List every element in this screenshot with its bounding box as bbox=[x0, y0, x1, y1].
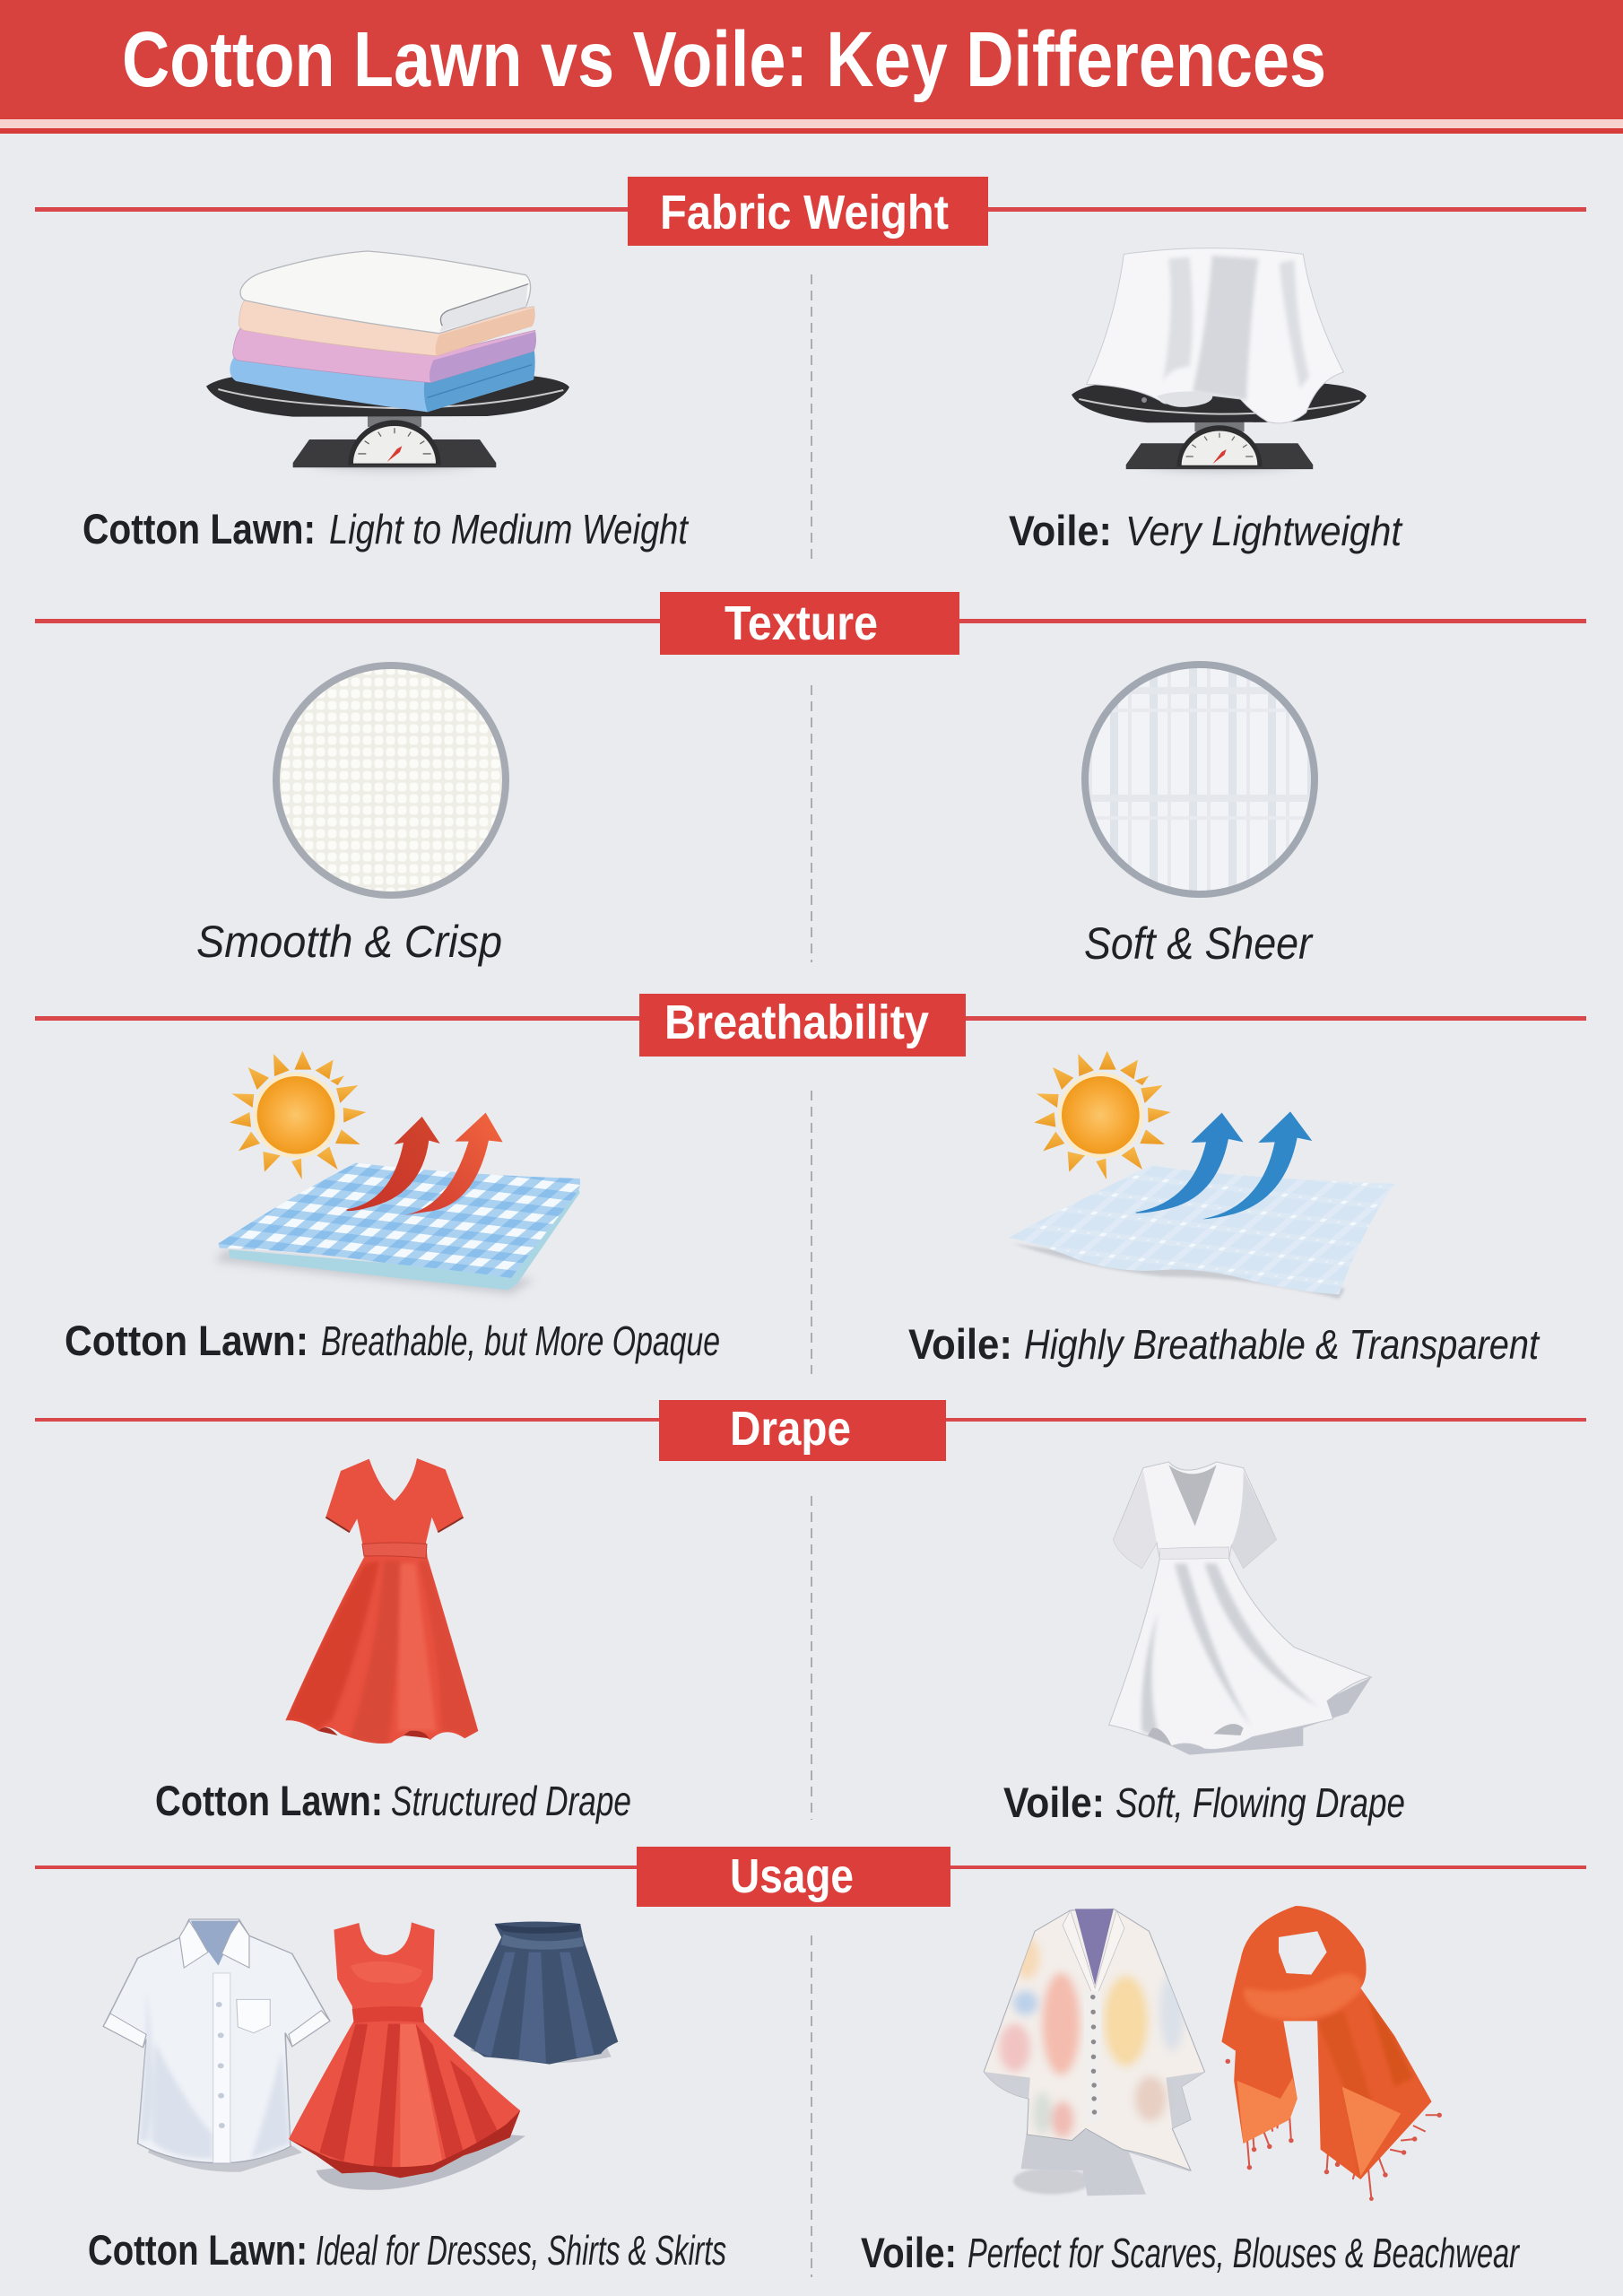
caption: voile breathability: Voile: bbox=[908, 1320, 1012, 1368]
gingham cloth bbox=[218, 1163, 580, 1278]
sheer cloth bbox=[1009, 1165, 1394, 1294]
icons: shirt, red dress and skirt bbox=[103, 1919, 618, 2190]
caption: voile usage: Voile: bbox=[861, 2229, 957, 2276]
scale plate bbox=[1072, 382, 1367, 422]
caption: voile texture: Soft & Sheer bbox=[1084, 918, 1314, 969]
caption: cotton lawn drape: Structured Drape bbox=[391, 1778, 631, 1824]
title banner bbox=[0, 0, 1623, 134]
caption: voile breathability: Highly Breathable & Transparent bbox=[1024, 1321, 1541, 1368]
caption: voile fabric weight: Voile: bbox=[1009, 507, 1112, 554]
caption: voile drape: Soft, Flowing Drape bbox=[1115, 1779, 1405, 1826]
icon: structured red dress bbox=[285, 1458, 478, 1744]
red dress bbox=[289, 1922, 525, 2190]
caption: voile fabric weight bbox=[1009, 507, 1403, 554]
blue folded fabric bbox=[230, 345, 535, 412]
blue arrow one bbox=[1136, 1113, 1244, 1213]
caption: cotton lawn breathability bbox=[65, 1317, 720, 1364]
divider: usage bbox=[811, 1935, 812, 2277]
sun bbox=[1034, 1051, 1171, 1179]
section header: Drape bbox=[35, 1400, 1586, 1461]
caption: cotton lawn fabric weight bbox=[82, 505, 690, 552]
cloth shadow bbox=[1013, 1244, 1345, 1299]
caption: cotton lawn drape: Cotton Lawn: bbox=[155, 1777, 383, 1824]
skirt bbox=[454, 1921, 618, 2065]
icon: flowing white voile dress bbox=[1109, 1462, 1371, 1755]
orange arrow bbox=[404, 1113, 503, 1215]
section header: Breathability: Breathability bbox=[664, 996, 929, 1049]
icon: sheer voile draped over a scale bbox=[1072, 248, 1367, 469]
caption: voile drape bbox=[1003, 1779, 1405, 1826]
floral voile blouse bbox=[984, 1909, 1204, 2196]
section header: Breathability bbox=[35, 994, 1586, 1057]
section header: Usage bbox=[35, 1847, 1586, 1907]
peach folded fabric bbox=[239, 298, 534, 356]
white folded fabric bbox=[240, 251, 531, 334]
caption: cotton lawn fabric weight: Light to Medium Weight bbox=[329, 506, 690, 552]
divider: fabric weight bbox=[811, 274, 812, 564]
divider: breathability bbox=[811, 1091, 812, 1374]
white voile drape bbox=[1087, 248, 1343, 423]
section header: Texture bbox=[35, 592, 1586, 655]
icon: sun over sheer voile with blue arrows bbox=[1009, 1051, 1394, 1299]
section header: Texture: Texture bbox=[725, 596, 878, 650]
scale base and dial bbox=[1126, 421, 1313, 469]
caption: voile drape: Voile: bbox=[1003, 1779, 1105, 1826]
red arrow bbox=[347, 1117, 440, 1211]
sun bbox=[230, 1051, 366, 1179]
caption: cotton lawn usage bbox=[88, 2226, 726, 2274]
icon: cotton lawn texture swatch bbox=[276, 665, 506, 895]
caption: cotton lawn breathability: Breathable, but More Opaque bbox=[321, 1318, 720, 1364]
orange scarf bbox=[1221, 1906, 1442, 2201]
caption: cotton lawn usage: Ideal for Dresses, Shirts & Skirts bbox=[316, 2227, 726, 2274]
icon: voile texture swatch bbox=[1085, 665, 1315, 894]
title: Cotton Lawn vs Voile: Key Differences bbox=[122, 16, 1326, 103]
caption: cotton lawn breathability: Cotton Lawn: bbox=[65, 1317, 308, 1364]
caption: voile fabric weight: Very Lightweight bbox=[1125, 508, 1403, 554]
caption: cotton lawn fabric weight: Cotton Lawn: bbox=[82, 505, 316, 552]
cloth shadow bbox=[215, 1249, 535, 1294]
section header: Fabric Weight: Fabric Weight bbox=[660, 186, 949, 239]
pink folded fabric bbox=[233, 325, 536, 383]
white shirt bbox=[103, 1919, 330, 2172]
scale plate bbox=[206, 374, 569, 417]
caption: cotton lawn drape bbox=[155, 1777, 631, 1824]
section header: Usage: Usage bbox=[730, 1849, 854, 1903]
divider: drape bbox=[811, 1496, 812, 1820]
blue arrow two bbox=[1202, 1111, 1312, 1219]
icon: stacked cotton lawn fabrics on a scale bbox=[206, 251, 569, 467]
icon: sun over gingham cotton lawn with red arrows bbox=[215, 1051, 580, 1294]
icons: floral kimono and orange scarf bbox=[984, 1906, 1442, 2201]
caption: cotton lawn texture: Smootth & Crisp bbox=[196, 917, 502, 967]
section header: Drape: Drape bbox=[730, 1402, 851, 1456]
divider: texture bbox=[811, 685, 812, 962]
section header: Fabric Weight bbox=[35, 177, 1586, 246]
scale base and dial bbox=[293, 415, 496, 467]
cloth underside bbox=[229, 1184, 580, 1290]
caption: cotton lawn usage: Cotton Lawn: bbox=[88, 2226, 308, 2274]
